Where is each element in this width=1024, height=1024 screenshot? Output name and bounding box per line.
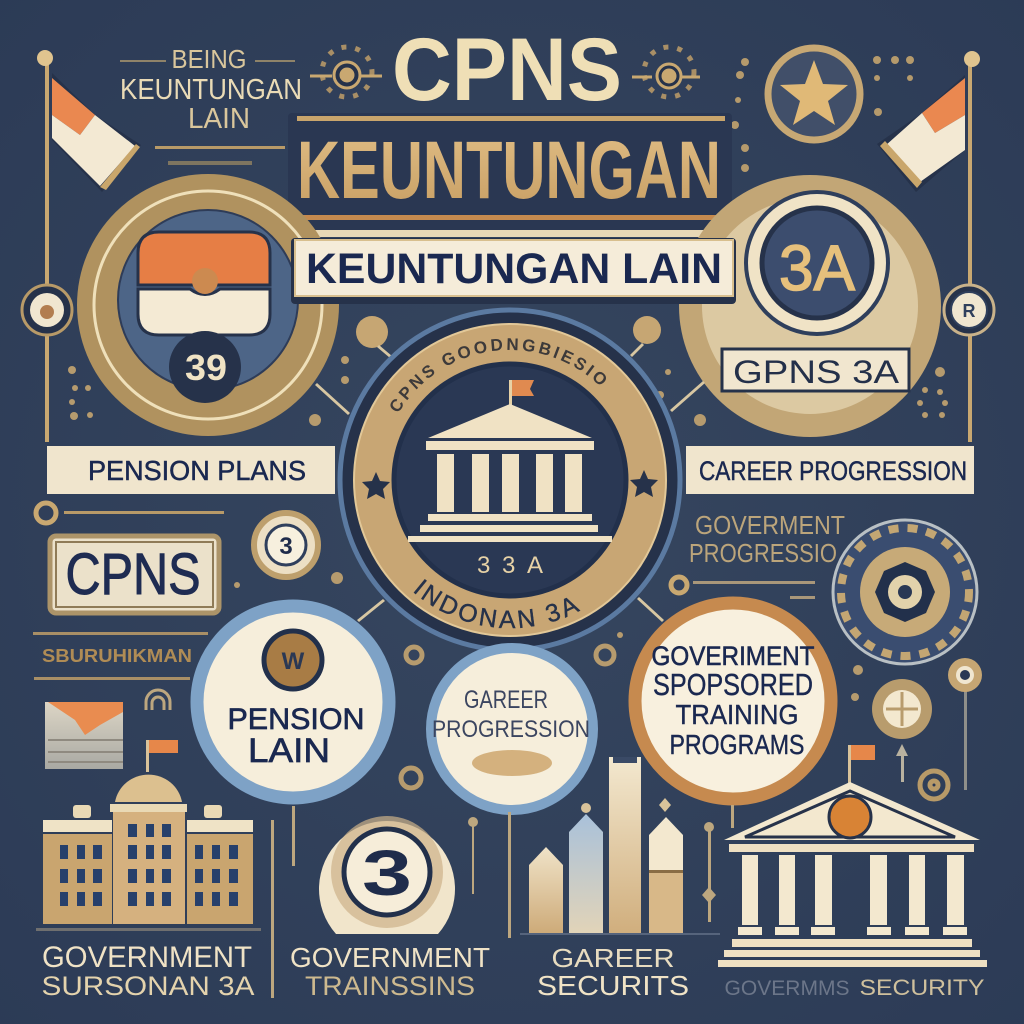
badge 3A right [746,192,888,334]
badge 3 [254,513,318,577]
small ornament ring [920,771,948,799]
bottom label trainssins: GOVERNMENT [290,942,490,973]
badge 3A right: 3A [779,232,855,304]
central seal with building [338,308,682,650]
badge 39 left: 39 [185,347,227,388]
ornament left of title [310,47,382,97]
bottom label security: GOVERMMS [724,977,850,1000]
small icon [146,690,170,710]
circle TRAINING PROGRAMS [635,603,831,799]
banner CAREER PROGRESSION: CAREER PROGRESSION [699,456,967,486]
right temple [718,745,987,967]
divider pins [271,805,734,998]
small text left: SBURUHIKMAN [42,646,192,666]
banner KEUNTUNGAN LAIN: KEUNTUNGAN LAIN [306,245,722,293]
small ring with lines [671,577,815,599]
small heading top left: KEUNTUNGAN [120,74,302,106]
left capitol building [36,740,261,931]
small text left [33,632,208,680]
star medal top right [768,48,860,140]
circle CAREER PROGRESSION: GAREER [464,686,548,714]
envelope icon [45,702,123,769]
seal right star [630,470,658,497]
banner CAREER PROGRESSION [686,446,974,494]
bottom label career [537,943,689,1001]
bottom label security [724,975,985,1000]
circle PENSION LAIN: LAIN [248,732,330,770]
circle PENSION LAIN [197,606,389,798]
small medal [872,679,932,739]
right ornament dots [731,56,914,172]
circle PENSION LAIN: W [282,648,305,675]
ornament right of title [632,47,700,97]
circle TRAINING PROGRAMS: GOVERIMENT [652,641,814,671]
circle TRAINING PROGRAMS: TRAINING [676,699,798,730]
bottom label career: GAREER [552,943,674,973]
seal ring text: CPNS GOODNGBIESIO [390,338,606,412]
badge 3: 3 [279,533,293,560]
small left node [22,285,72,335]
left flag with pole [37,50,141,442]
text Government Progression [689,510,845,568]
text Government Progression: GOVERMENT [695,510,845,540]
seal label 3A: 33A [477,552,543,579]
label GPNS 3A: GPNS 3A [733,354,900,390]
small heading top left: BEING [172,44,246,74]
bar towers chart [520,757,720,935]
compass medal [833,520,977,664]
headline banner KEUNTUNGAN: KEUNTUNGAN [297,125,721,216]
banner PENSION PLANS: PENSION PLANS [88,455,306,486]
small ring with stem [948,658,982,790]
connector coins and decorative dots [68,316,948,788]
bottom label security: SECURITY [860,975,985,1000]
bottom label government [42,941,254,1001]
right flag with pole [877,51,980,442]
small heading top left: LAIN [188,103,250,135]
left large medallion with flag [77,174,339,436]
headline banner KEUNTUNGAN [288,113,732,237]
seal left star [362,472,390,499]
title CPNS: CPNS [392,19,622,119]
small up arrow [896,744,908,782]
bottom label trainssins: TRAINSSINS [305,971,475,1001]
badge 3 bottom: 3 [362,837,412,909]
seal lower text: INDONAN 3A [414,579,580,628]
CPNS box: CPNS [66,542,200,607]
badge 39 left [169,331,241,403]
banner PENSION PLANS [47,446,335,494]
bottom label government: SURSONAN 3A [42,971,254,1001]
bottom label career: SECURITS [537,970,689,1001]
node left row [36,503,224,523]
circle CAREER PROGRESSION: PROGRESSION [432,716,590,743]
label GPNS 3A [722,349,909,391]
banner KEUNTUNGAN LAIN [291,238,736,304]
bottom label trainssins [290,942,490,1001]
small right node: R [962,301,976,321]
small heading top left [120,44,302,165]
small right node [944,285,994,335]
circle TRAINING PROGRAMS: SPOPSORED [653,667,813,702]
bottom label government: GOVERNMENT [42,941,252,974]
flag on building [509,380,534,408]
circle PENSION LAIN: PENSION [228,703,364,736]
badge 3 bottom [319,816,455,934]
circle CAREER PROGRESSION [431,648,593,810]
text Government Progression: PROGRESSIO [689,538,837,568]
building icon [408,404,612,542]
circle TRAINING PROGRAMS: PROGRAMS [670,729,804,760]
right large medallion [679,175,941,437]
